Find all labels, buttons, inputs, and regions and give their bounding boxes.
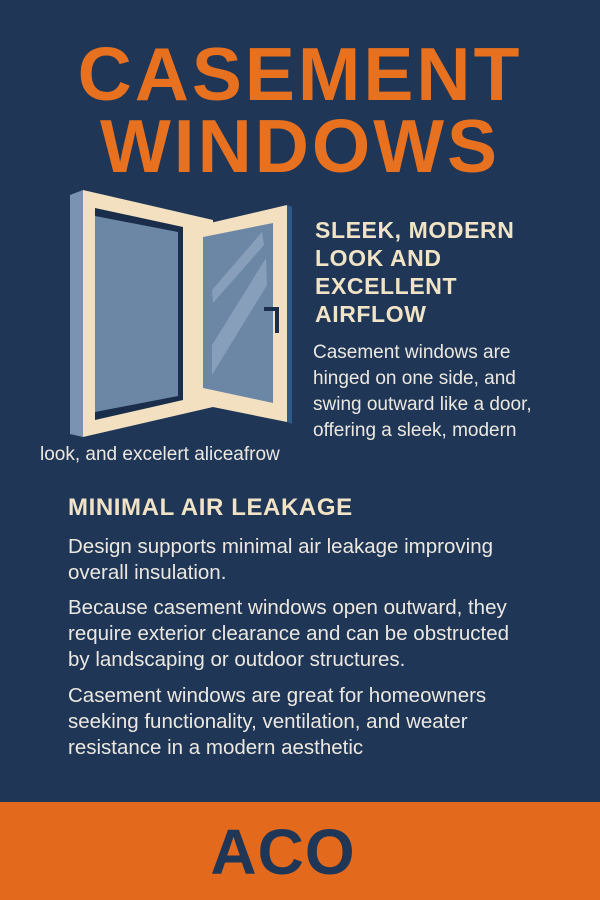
heading: sleek modern look: LOOK AND [315,245,442,271]
title: CASEMENT [78,32,522,116]
text block: clearance: require exterior clearance and can be obstructed [68,622,509,645]
text block: clearance [68,596,509,671]
title: WINDOWS [100,104,500,188]
text block: intro: hinged on one side, and [313,368,516,389]
icon: open casement window [70,190,292,437]
title [78,32,522,188]
footer [0,802,600,900]
text block: conclusion [68,684,486,759]
heading: minimal air leakage: MINIMAL AIR LEAKAGE [68,494,353,521]
heading: sleek modern look: EXCELLENT [315,273,457,299]
text block: conclusion: seeking functionality, ventilation, and weater [68,710,468,733]
heading: sleek modern look: SLEEK, MODERN [315,217,514,243]
heading: sleek modern look [315,217,514,327]
text block: intro: offering a sleek, modern [313,420,516,441]
text block: continuation: look, and excelert aliceafrow [40,444,280,465]
text block: insulation: overall insulation. [68,561,226,584]
text block: clearance: by landscaping or outdoor structures. [68,648,405,671]
text block: insulation: Design supports minimal air leakage improving [68,535,493,558]
text block: conclusion: Casement windows are great for homeowners [68,684,486,707]
heading: sleek modern look: AIRFLOW [315,301,427,327]
text block: insulation [68,535,493,584]
text block: conclusion: resistance in a modern aesthetic [68,736,363,759]
text block: intro: swing outward like a door, [313,394,532,415]
text block: intro [313,342,532,441]
text block: clearance: Because casement windows open outward, they [68,596,507,619]
logo: ACO: ACO [210,816,356,888]
text block: intro: Casement windows are [313,342,510,363]
